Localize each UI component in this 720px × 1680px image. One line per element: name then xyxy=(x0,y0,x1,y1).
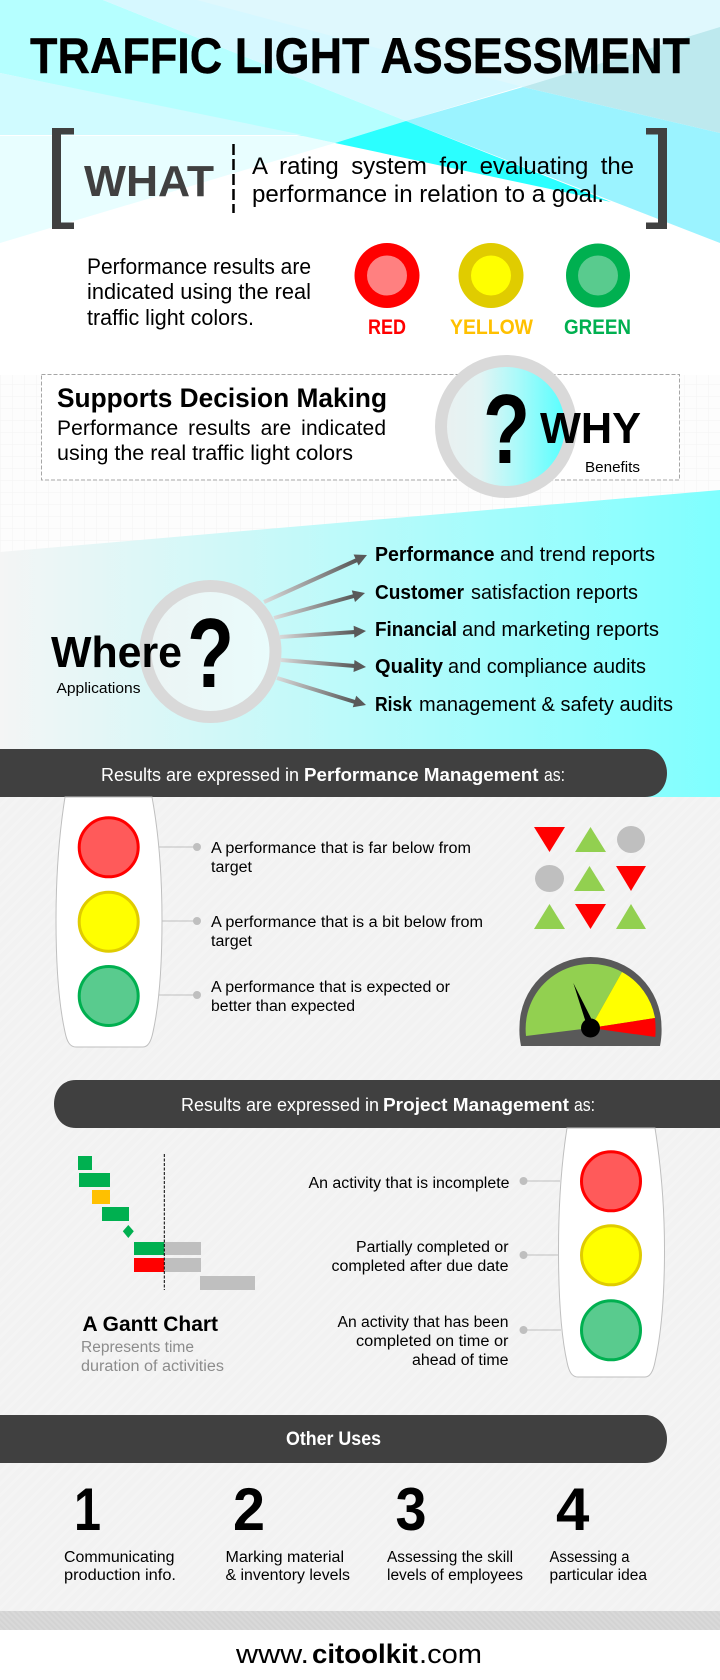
use 2: Marking material xyxy=(226,1549,344,1566)
performance legend: bit below xyxy=(162,914,483,950)
text: performance results: traffic light colors. xyxy=(87,305,254,330)
use 4: particular idea xyxy=(550,1567,647,1584)
applications label: Applications xyxy=(56,680,140,697)
performance legend: far below: A performance that is far below from xyxy=(211,840,471,857)
traffic light: performance xyxy=(56,797,162,1047)
application list: Quality xyxy=(375,655,444,678)
icon: yellow light xyxy=(450,243,533,339)
arrows xyxy=(264,554,367,707)
gantt caption xyxy=(81,1313,224,1375)
project legend: partial: Partially completed or xyxy=(356,1239,508,1256)
use 2 xyxy=(226,1476,350,1584)
text: performance results: indicated using the real xyxy=(87,279,311,304)
use 2: 2 xyxy=(233,1476,265,1543)
banner: other uses xyxy=(0,1415,667,1463)
traffic light: project xyxy=(558,1128,664,1377)
project legend: on time: An activity that has been xyxy=(338,1314,508,1331)
heading: supports decision making: Supports Decision Making xyxy=(57,383,387,413)
grid background xyxy=(0,375,720,797)
use 3 xyxy=(387,1476,523,1584)
panel: why xyxy=(42,361,680,492)
panel: where xyxy=(51,543,673,717)
application list: Financial xyxy=(375,618,457,641)
panel: what xyxy=(52,128,667,229)
project legend: incomplete: An activity that is incomplete xyxy=(308,1175,510,1192)
application list: management & safety audits xyxy=(419,693,673,716)
application list: Customer xyxy=(375,581,464,604)
benefits label: Benefits xyxy=(585,459,640,476)
application list: Performance xyxy=(375,543,494,566)
banner: project management xyxy=(54,1080,720,1128)
performance legend: expected: better than expected xyxy=(211,998,355,1015)
application list: and compliance audits xyxy=(448,655,646,678)
icon: question circle: ? xyxy=(483,374,530,484)
banner: project management: Results are expressed in xyxy=(181,1095,379,1115)
banner: performance management: Performance Management xyxy=(304,765,538,785)
where heading: Where xyxy=(51,628,182,677)
right bracket xyxy=(646,128,667,229)
header background polygons xyxy=(0,0,720,380)
dashed divider xyxy=(232,144,235,213)
why description: using the real traffic light colors xyxy=(57,442,353,465)
use 4 xyxy=(550,1476,647,1584)
use 3: 3 xyxy=(396,1476,426,1543)
use 1: Communicating xyxy=(64,1549,174,1566)
use 3: levels of employees xyxy=(387,1567,523,1584)
icon: red light: RED xyxy=(368,316,406,339)
gantt caption: Represents time xyxy=(81,1339,194,1356)
use 1: 1 xyxy=(74,1476,101,1543)
banner: project management: as: xyxy=(574,1095,595,1115)
banner: performance management: Results are expressed in xyxy=(101,765,299,785)
left bracket xyxy=(52,128,74,229)
what definition: performance in relation to a goal. xyxy=(252,181,604,208)
use 3: Assessing the skill xyxy=(387,1549,513,1566)
gantt chart xyxy=(78,1154,255,1290)
project legend: on time: completed on time or xyxy=(356,1333,508,1350)
use 1: production info. xyxy=(64,1567,176,1584)
footer stripe xyxy=(0,1611,720,1630)
application list: satisfaction reports xyxy=(471,581,638,604)
performance legend: expected: A performance that is expected or xyxy=(211,979,450,996)
performance legend: far below xyxy=(159,840,471,876)
application list xyxy=(375,543,673,716)
application list: and marketing reports xyxy=(462,618,659,641)
why description: Performance results are indicated xyxy=(57,417,386,440)
what definition: A rating system for evaluating the xyxy=(252,153,634,180)
where section cyan background xyxy=(0,490,720,797)
banner: other uses: Other Uses xyxy=(286,1429,381,1450)
website: citoolkit xyxy=(312,1639,418,1669)
icon: green light xyxy=(564,244,631,339)
icon: green light: GREEN xyxy=(564,316,631,339)
use 4: 4 xyxy=(556,1476,590,1543)
application list: Risk xyxy=(375,693,413,716)
project legend: on time xyxy=(338,1314,561,1369)
status icon grid xyxy=(534,826,646,929)
gantt caption: A Gantt Chart xyxy=(82,1313,218,1336)
website: www. xyxy=(235,1639,309,1669)
project legend: partial: completed after due date xyxy=(332,1258,508,1275)
what heading: WHAT xyxy=(84,157,214,206)
performance legend: bit below: target xyxy=(211,933,253,950)
banner: performance management: as: xyxy=(544,765,565,785)
icon: red light xyxy=(354,243,420,339)
project legend: on time: ahead of time xyxy=(412,1352,508,1369)
performance legend: bit below: A performance that is a bit below from xyxy=(211,914,483,931)
use 1 xyxy=(64,1476,176,1584)
performance legend: far below: target xyxy=(211,859,253,876)
banner: project management: Project Management xyxy=(383,1095,569,1115)
icon: question circle: ? xyxy=(187,598,234,708)
project legend: partial xyxy=(332,1239,558,1275)
banner: performance management xyxy=(0,749,667,797)
lower section background xyxy=(0,797,720,1611)
performance legend: expected xyxy=(159,979,450,1015)
why heading: WHY xyxy=(540,404,641,453)
text: performance results: Performance results are xyxy=(87,254,311,279)
use 4: Assessing a xyxy=(550,1549,630,1566)
icon: question circle xyxy=(441,361,571,492)
application list: and trend reports xyxy=(500,543,655,566)
use 2: & inventory levels xyxy=(226,1567,350,1584)
icon: yellow light: YELLOW xyxy=(450,316,533,339)
icon: question circle xyxy=(146,586,276,717)
gauge xyxy=(519,957,662,1046)
website: .com xyxy=(419,1639,482,1669)
gantt caption: duration of activities xyxy=(81,1358,224,1375)
